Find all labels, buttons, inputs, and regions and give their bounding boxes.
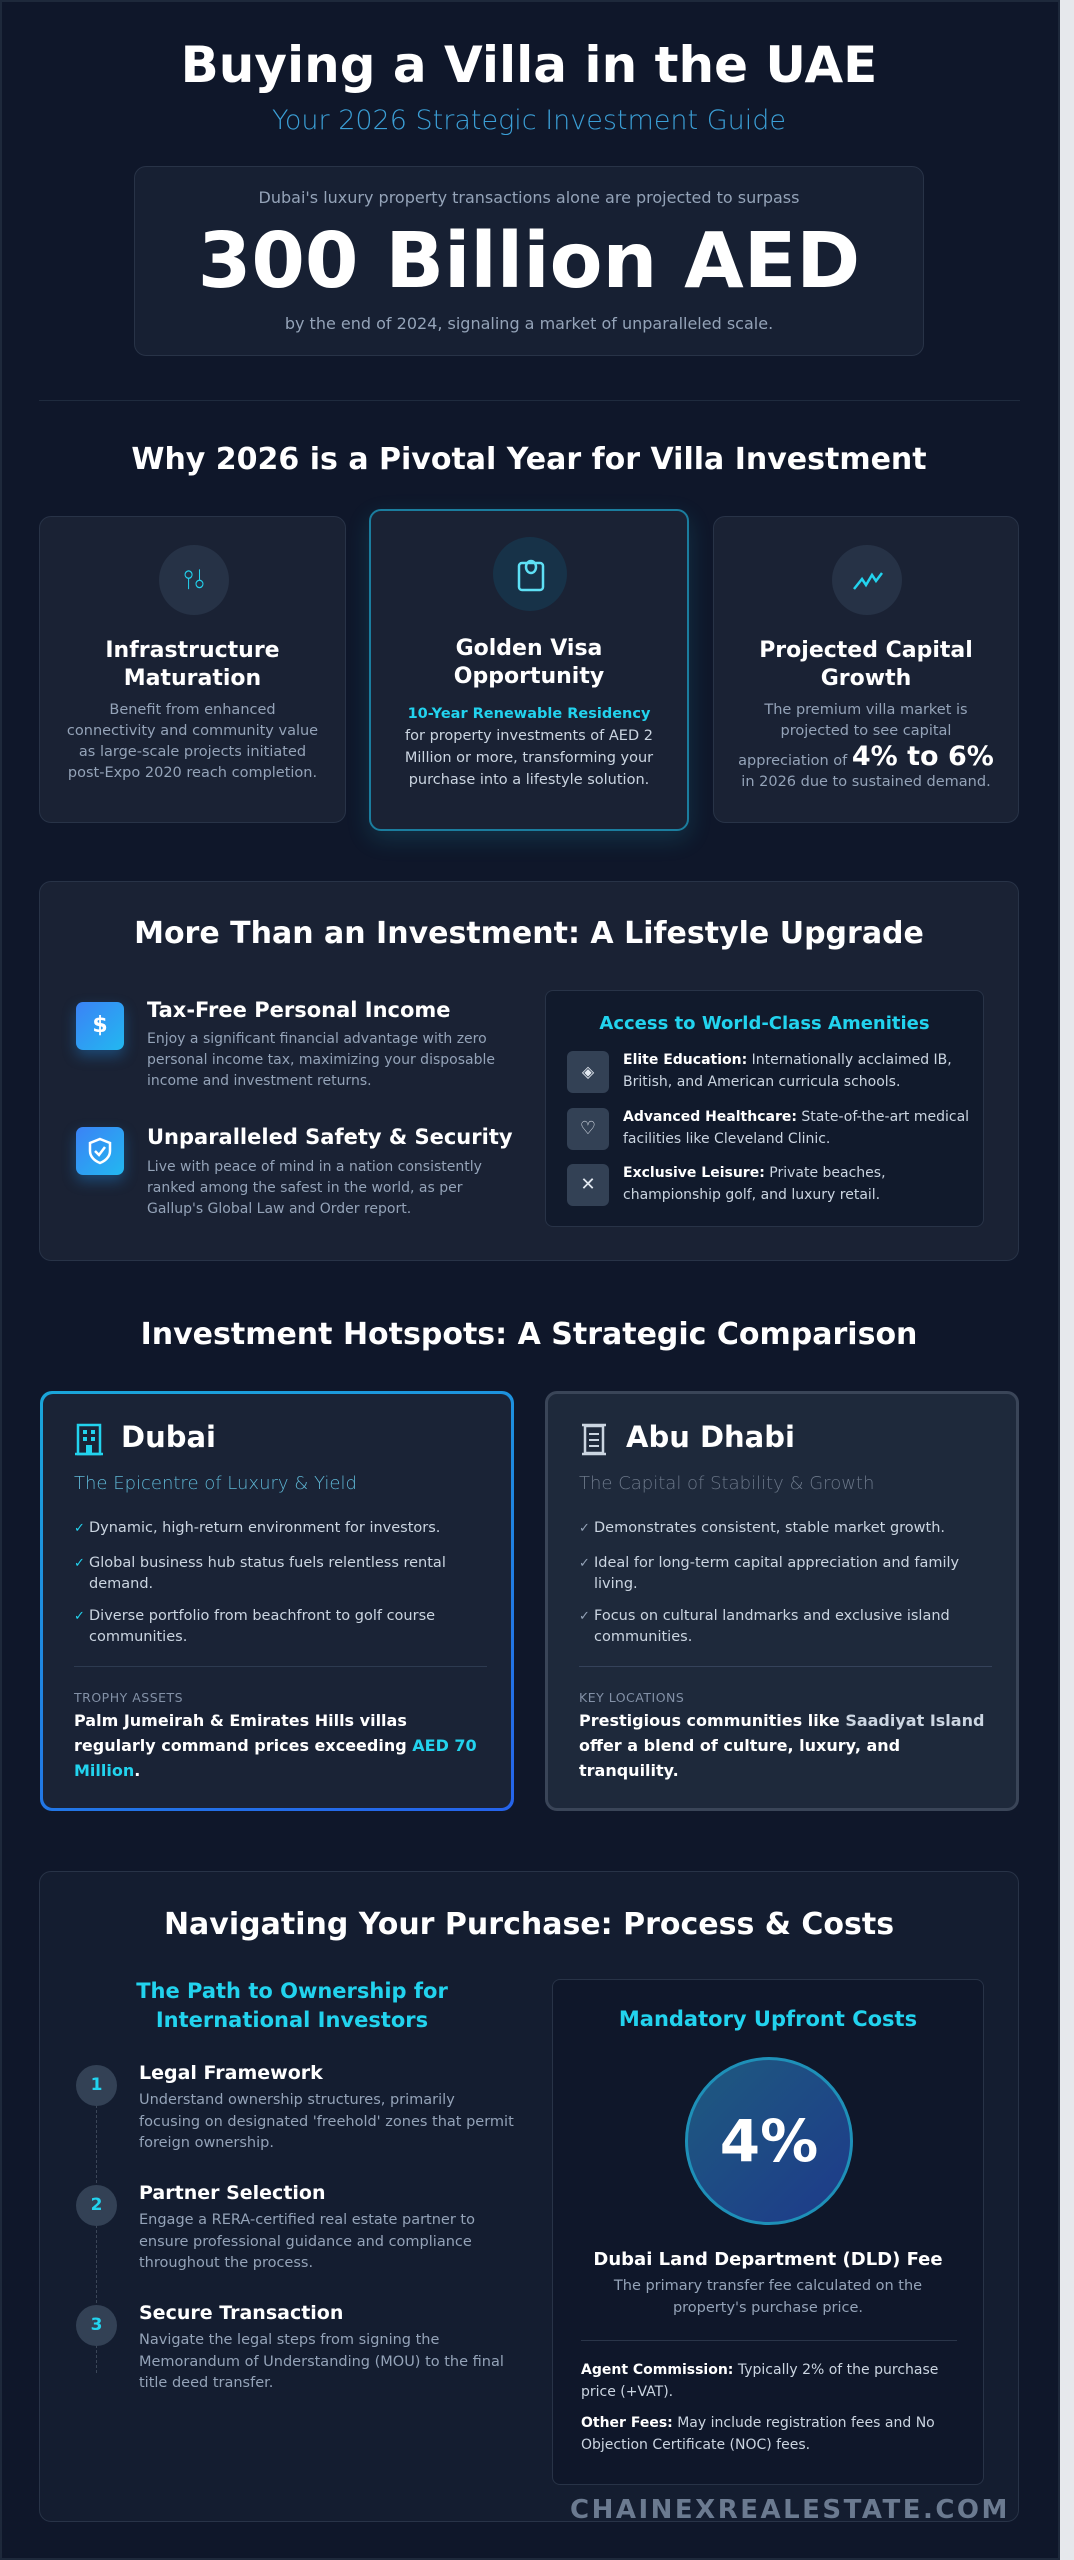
card: capital growth bbox=[713, 516, 1019, 823]
step 2 bbox=[76, 2182, 475, 2271]
card: dubai bbox=[40, 1391, 514, 1811]
bullets: Focus on cultural landmarks and exclusive island communities. bbox=[594, 1608, 950, 1645]
bullets: Demonstrates consistent, stable market growth. bbox=[594, 1520, 945, 1536]
icon: x bbox=[567, 1164, 609, 1206]
heading: why 2026: Why 2026 is a Pivotal Year for Villa Investment bbox=[131, 442, 927, 477]
step 1: Legal Framework bbox=[139, 2062, 323, 2084]
card text: for property investments of AED 2 bbox=[405, 728, 653, 744]
card text: Benefit from enhanced bbox=[109, 702, 276, 718]
icon: shield bbox=[76, 1127, 124, 1175]
card: abu dhabi bbox=[545, 1391, 1019, 1811]
card text bbox=[67, 702, 318, 781]
title: Buying a Villa in the UAE bbox=[181, 36, 877, 94]
bullets: ✓ bbox=[74, 1609, 85, 1624]
watermark: CHAINEXREALESTATE.COM bbox=[570, 2495, 1010, 2525]
icon: infrastructure bbox=[159, 545, 229, 615]
card text: appreciation of 4% to 6% bbox=[738, 741, 994, 772]
key locations: Prestigious communities like Saadiyat Island offer a blend of culture, luxury, and tranquility. bbox=[579, 1711, 984, 1780]
step 2: Engage a RERA-certified real estate partner to ensure professional guidance and compliance throughout the process. bbox=[139, 2212, 475, 2271]
4% circle bbox=[685, 2057, 853, 2225]
card heading: Golden Visa bbox=[456, 636, 602, 661]
card heading bbox=[454, 636, 604, 689]
bullets: ✓ bbox=[579, 1521, 590, 1536]
amenities box bbox=[545, 990, 984, 1227]
step 3: Navigate the legal steps from signing the Memorandum of Understanding (MOU) to the final title deed transfer. bbox=[139, 2332, 504, 2391]
amenity: healthcare: Advanced Healthcare: State-of-the-art medical facilities like Cleveland Clinic. bbox=[623, 1109, 969, 1146]
icon: money: $ bbox=[92, 1013, 108, 1038]
icon: x: ✕ bbox=[580, 1174, 596, 1195]
trophy assets: Palm Jumeirah & Emirates Hills villas regularly command prices exceeding AED 70 Million. bbox=[74, 1711, 477, 1780]
card heading: Growth bbox=[821, 666, 911, 691]
step 1 bbox=[76, 2062, 514, 2151]
4% circle: 4% bbox=[720, 2107, 818, 2175]
card text: The premium villa market is bbox=[764, 702, 968, 718]
step 3: Secure Transaction bbox=[139, 2302, 343, 2324]
icon: cap bbox=[567, 1051, 609, 1093]
costs box: The primary transfer fee calculated on the bbox=[614, 2278, 922, 2294]
amenity: leisure: Exclusive Leisure: Private beaches, championship golf, and luxury retail. bbox=[623, 1165, 886, 1202]
heading: Tax-Free Personal Income bbox=[147, 998, 451, 1022]
name: Dubai bbox=[121, 1420, 216, 1454]
bullets: Dynamic, high-return environment for investors. bbox=[89, 1520, 440, 1536]
path heading: The Path to Ownership for bbox=[136, 1979, 448, 2003]
costs heading: Mandatory Upfront Costs bbox=[619, 2007, 917, 2031]
heading: More Than an Investment: A Lifestyle Upgrade bbox=[134, 916, 924, 951]
card heading: Opportunity bbox=[454, 664, 604, 689]
other costs: Agent Commission: Typically 2% of the purchase price (+VAT). bbox=[581, 2362, 938, 2400]
card text: as large-scale projects initiated bbox=[79, 744, 306, 760]
icon: infrastructure: ⫯⫰ bbox=[183, 565, 205, 595]
icon: tower bbox=[582, 1424, 606, 1456]
costs box bbox=[552, 1979, 984, 2485]
card text: purchase into a lifestyle solution. bbox=[409, 772, 649, 788]
DLD fee: Dubai Land Department (DLD) Fee bbox=[593, 2249, 943, 2270]
item: tax free bbox=[68, 998, 495, 1089]
item: safety bbox=[68, 1125, 513, 1217]
card text: projected to see capital bbox=[781, 723, 951, 739]
step 2: Partner Selection bbox=[139, 2182, 326, 2204]
bullets: ✓ bbox=[579, 1556, 590, 1571]
timeline line bbox=[96, 2085, 97, 2373]
path heading: International Investors bbox=[156, 2008, 428, 2032]
stat outro text: by the end of 2024, signaling a market of unparalleled scale. bbox=[285, 314, 773, 333]
icon: heart: ♡ bbox=[580, 1118, 596, 1139]
costs box: property's purchase price. bbox=[673, 2300, 863, 2316]
card text: in 2026 due to sustained demand. bbox=[741, 774, 991, 790]
icon: cap: ◈ bbox=[582, 1062, 594, 1081]
step 2: 2 bbox=[91, 2195, 102, 2215]
amenity: education: Elite Education: Internationally acclaimed IB, British, and American curricula schools. bbox=[623, 1052, 952, 1090]
bullets: Global business hub status fuels relentless rental demand. bbox=[89, 1555, 446, 1592]
subtitle: Your 2026 Strategic Investment Guide bbox=[272, 105, 786, 136]
card heading bbox=[105, 638, 280, 691]
bullets: Ideal for long-term capital appreciation and family living. bbox=[594, 1555, 959, 1592]
icon: visa bbox=[493, 537, 567, 611]
card text: post-Expo 2020 reach completion. bbox=[68, 765, 317, 781]
name: Abu Dhabi bbox=[626, 1420, 795, 1454]
card heading: Projected Capital bbox=[759, 638, 973, 663]
path heading bbox=[136, 1979, 448, 2032]
icon: heart bbox=[567, 1108, 609, 1150]
step 3: 3 bbox=[91, 2315, 102, 2335]
bullets: ✓ bbox=[74, 1556, 85, 1571]
card: golden visa bbox=[369, 509, 689, 831]
panel: lifestyle bbox=[39, 881, 1019, 1261]
key locations: KEY LOCATIONS bbox=[579, 1690, 684, 1705]
bullets: Diverse portfolio from beachfront to golf course communities. bbox=[89, 1608, 435, 1645]
heading: Unparalleled Safety & Security bbox=[147, 1125, 513, 1149]
card text bbox=[738, 702, 994, 790]
trophy assets: TROPHY ASSETS bbox=[74, 1690, 183, 1705]
heading: hotspots: Investment Hotspots: A Strategic Comparison bbox=[141, 1317, 917, 1352]
stat intro text: Dubai's luxury property transactions alone are projected to surpass bbox=[259, 188, 799, 207]
stat number: 300 Billion AED bbox=[198, 217, 860, 306]
step 3 bbox=[76, 2302, 504, 2391]
card heading: Infrastructure bbox=[105, 638, 280, 663]
icon: money bbox=[76, 1002, 124, 1050]
card heading bbox=[759, 638, 973, 691]
stat box bbox=[134, 166, 924, 356]
subtitle: The Capital of Stability & Growth bbox=[579, 1473, 874, 1494]
panel: process & costs bbox=[39, 1871, 1019, 2522]
bullets bbox=[579, 1520, 959, 1645]
icon: chart bbox=[832, 545, 902, 615]
bullets: ✓ bbox=[579, 1609, 590, 1624]
step 1: Understand ownership structures, primarily focusing on designated 'freehold' zones that permit foreign ownership. bbox=[139, 2092, 514, 2151]
step 1: 1 bbox=[91, 2075, 102, 2095]
text: Live with peace of mind in a nation consistently ranked among the safest in the world, as per Gallup's Global Law and Order report. bbox=[147, 1159, 482, 1217]
subtitle: The Epicentre of Luxury & Yield bbox=[74, 1473, 357, 1494]
card text bbox=[405, 706, 654, 788]
bullets: ✓ bbox=[74, 1521, 85, 1536]
text: Enjoy a significant financial advantage with zero personal income tax, maximizing your disposable income and investment returns. bbox=[147, 1031, 495, 1089]
other costs: Other Fees: May include registration fees and No Objection Certificate (NOC) fees. bbox=[581, 2415, 935, 2452]
amenities heading: Access to World-Class Amenities bbox=[599, 1013, 930, 1034]
bullets bbox=[74, 1520, 446, 1645]
other costs bbox=[581, 2362, 938, 2452]
card text: 10-Year Renewable Residency bbox=[408, 706, 650, 722]
card text: Million or more, transforming your bbox=[405, 750, 653, 766]
card: infrastructure bbox=[39, 516, 346, 823]
card text: connectivity and community value bbox=[67, 723, 318, 739]
card heading: Maturation bbox=[124, 666, 261, 691]
heading: Navigating Your Purchase: Process & Costs bbox=[164, 1907, 894, 1942]
icon: building bbox=[75, 1424, 103, 1456]
